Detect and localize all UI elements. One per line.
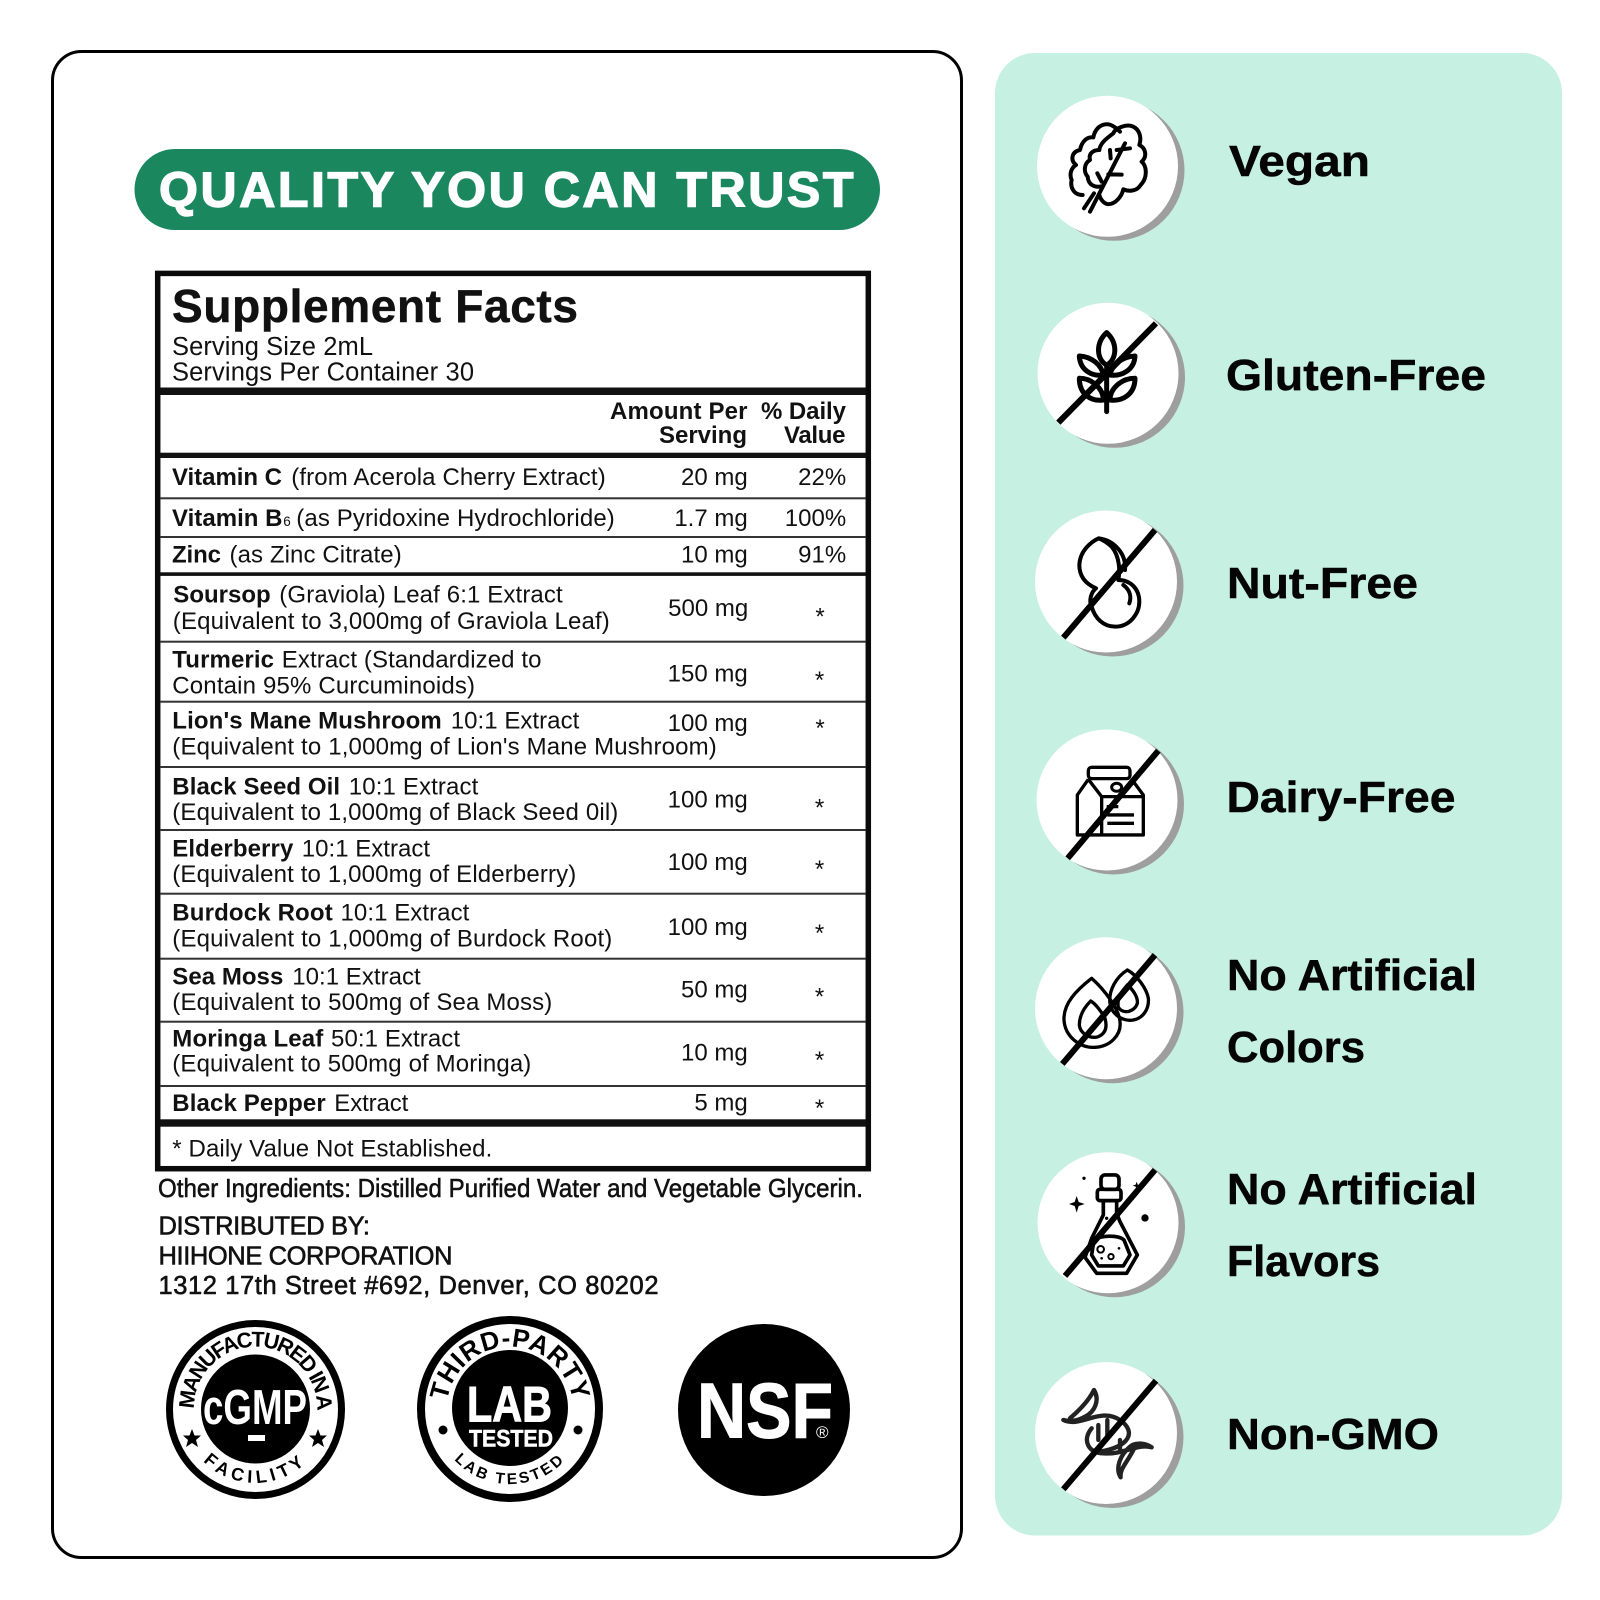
distributor address (158, 1212, 658, 1300)
row: sea moss: * (815, 984, 824, 1010)
badge: NSF: NSF (697, 1367, 833, 1455)
row: burdock root: 10:1 Extract (340, 900, 470, 927)
row: black seed oil: 100 mg (668, 787, 748, 814)
row: soursop (173, 582, 825, 635)
heading pill: quality you can trust (134, 149, 880, 230)
other ingredients: Other Ingredients: Distilled Purified Water and Vegetable Glycerin. (158, 1173, 863, 1203)
row: vitamin c: (from Acerola Cherry Extract) (291, 464, 606, 491)
row: burdock root: 100 mg (668, 914, 748, 941)
icon: dna with slash (1035, 1362, 1184, 1508)
row: lion's mane mushroom: (Equivalent to 1,000mg of Lion's Mane Mushroom) (172, 733, 717, 760)
row: zinc: (as Zinc Citrate) (230, 542, 402, 569)
footnote: * Daily Value Not Established. (172, 1136, 492, 1162)
badge: third-party lab tested: THIRD-PARTY (430, 1328, 590, 1397)
row: turmeric: 150 mg (668, 661, 748, 688)
distributor address: DISTRIBUTED BY: (158, 1212, 370, 1240)
column headers: Amount Per (610, 398, 748, 425)
row: soursop: 500 mg (668, 595, 748, 622)
row: moringa leaf: (Equivalent to 500mg of Moringa) (172, 1051, 531, 1078)
icon: milk carton with slash (1036, 730, 1184, 874)
row: vitamin b6 (172, 505, 846, 532)
distributor address: 1312 17th Street #692, Denver, CO 80202 (158, 1272, 658, 1300)
row: black pepper: * (815, 1095, 824, 1122)
row: soursop: * (815, 604, 825, 631)
row: elderberry (172, 836, 824, 888)
row: vitamin b6: (as Pyridoxine Hydrochloride) (296, 505, 615, 532)
row: turmeric: Extract (Standardized to (282, 647, 542, 674)
badge: third-party lab tested (417, 1316, 603, 1502)
serving information: Servings Per Container 30 (172, 358, 474, 386)
attribute: nut-free: Nut-Free (1227, 559, 1418, 608)
row: vitamin c: Vitamin C (172, 464, 282, 491)
column headers: % Daily (761, 398, 847, 425)
attribute: no artificial colors (1035, 937, 1477, 1083)
attribute: nut-free (1035, 510, 1418, 656)
row: vitamin b6: 1.7 mg (674, 505, 748, 532)
label: Colors (1227, 1023, 1365, 1072)
badge: cGMP: FACILITY (204, 1452, 301, 1484)
row: vitamin b6: 6 (283, 514, 291, 529)
row: soursop: Soursop (173, 582, 271, 609)
row: elderberry: (Equivalent to 1,000mg of Elderberry) (172, 861, 576, 888)
table title: Supplement Facts (172, 280, 578, 332)
row: moringa leaf: 10 mg (681, 1040, 748, 1066)
row: burdock root: * (815, 920, 824, 947)
row: black seed oil: Black Seed Oil (172, 773, 340, 800)
distributor address: HIIHONE CORPORATION (158, 1242, 452, 1270)
row: black pepper: Extract (334, 1090, 409, 1117)
row: vitamin c (172, 464, 846, 491)
attribute: gluten-free (1038, 303, 1486, 448)
row: burdock root (172, 900, 824, 953)
panel: supplement facts card (51, 50, 963, 1559)
icon: drops with slash (1035, 937, 1184, 1083)
row: elderberry: 100 mg (668, 849, 748, 876)
row: turmeric: Contain 95% Curcuminoids) (172, 672, 475, 699)
attribute: vegan (1037, 96, 1370, 241)
label: No Artificial (1227, 951, 1477, 1000)
row: zinc: 10 mg (681, 542, 748, 569)
badge: NSF: ® (816, 1423, 829, 1442)
row: moringa leaf: Moringa Leaf (172, 1026, 324, 1053)
attribute: vegan: Vegan (1229, 137, 1370, 186)
icon: flask with slash (1038, 1152, 1185, 1297)
label: No Artificial (1227, 1165, 1477, 1214)
row: lion's mane mushroom (172, 707, 825, 760)
serving information: Serving Size 2mL (172, 333, 373, 361)
row: black pepper (172, 1090, 824, 1122)
row: black pepper: 5 mg (694, 1090, 748, 1116)
row: black seed oil (172, 773, 824, 826)
row: vitamin b6: 100% (785, 505, 846, 532)
row: black seed oil: 10:1 Extract (349, 773, 479, 800)
badge: third-party lab tested: LAB (467, 1377, 552, 1433)
row: lion's mane mushroom: 100 mg (668, 710, 748, 737)
row: sea moss (172, 963, 824, 1016)
supplement facts table (158, 273, 868, 1169)
label (1227, 951, 1477, 1072)
row: moringa leaf (172, 1026, 824, 1078)
attribute: non-gmo: Non-GMO (1227, 1410, 1439, 1459)
row: lion's mane mushroom: * (815, 715, 825, 742)
badge: cGMP: MANUFACTURED IN A (179, 1332, 332, 1410)
badge: cGMP (166, 1320, 345, 1499)
attribute: gluten-free: Gluten-Free (1226, 351, 1486, 400)
row: soursop: (Equivalent to 3,000mg of Graviola Leaf) (173, 608, 610, 635)
row: turmeric: * (815, 667, 824, 694)
row: turmeric: Turmeric (172, 647, 274, 674)
icon: leaf (1037, 96, 1184, 241)
attribute: dairy-free (1036, 730, 1456, 874)
icon: nut with slash (1035, 510, 1184, 656)
row: lion's mane mushroom: Lion's Mane Mushroom (172, 707, 442, 734)
column headers: Value (784, 422, 846, 449)
badge: third-party lab tested: LAB TESTED (454, 1452, 562, 1484)
serving information (172, 333, 474, 386)
row: turmeric (172, 647, 824, 699)
row: black seed oil: * (815, 795, 824, 822)
row: burdock root: (Equivalent to 1,000mg of Burdock Root) (172, 926, 612, 953)
row: vitamin c: 22% (798, 464, 846, 491)
column headers: Serving (659, 422, 747, 449)
row: sea moss: (Equivalent to 500mg of Sea Moss) (172, 989, 552, 1016)
badge: third-party lab tested: TESTED (469, 1426, 553, 1453)
row: zinc: Zinc (172, 542, 221, 569)
attribute: no artificial flavors (1038, 1152, 1477, 1297)
row: burdock root: Burdock Root (172, 900, 333, 927)
row: vitamin b6: Vitamin B (172, 505, 282, 532)
row: zinc (172, 542, 846, 569)
row: soursop: (Graviola) Leaf 6:1 Extract (279, 582, 563, 609)
row: elderberry: 10:1 Extract (302, 836, 430, 863)
row: moringa leaf: * (815, 1047, 824, 1074)
row: sea moss: 10:1 Extract (292, 963, 421, 990)
label (1227, 1165, 1477, 1286)
row: vitamin c: 20 mg (681, 464, 748, 491)
row: elderberry: Elderberry (172, 836, 294, 863)
row: zinc: 91% (798, 542, 846, 569)
row: black seed oil: (Equivalent to 1,000mg of Black Seed 0il) (172, 799, 618, 826)
row: lion's mane mushroom: 10:1 Extract (451, 707, 580, 734)
label: Flavors (1227, 1237, 1380, 1286)
panel: product attributes (995, 53, 1562, 1536)
heading pill: quality you can trust: QUALITY YOU CAN TRUST (159, 164, 856, 218)
icon: wheat with slash (1038, 303, 1185, 448)
attribute: dairy-free: Dairy-Free (1226, 773, 1456, 822)
row: black pepper: Black Pepper (172, 1090, 326, 1117)
attribute: non-gmo (1035, 1362, 1439, 1508)
row: sea moss: Sea Moss (172, 963, 283, 990)
column headers (610, 398, 847, 449)
row: moringa leaf: 50:1 Extract (331, 1026, 460, 1053)
badge: cGMP: cGMP (203, 1381, 307, 1435)
row: sea moss: 50 mg (681, 977, 748, 1004)
row: elderberry: * (815, 856, 824, 883)
badge: NSF (678, 1324, 850, 1496)
